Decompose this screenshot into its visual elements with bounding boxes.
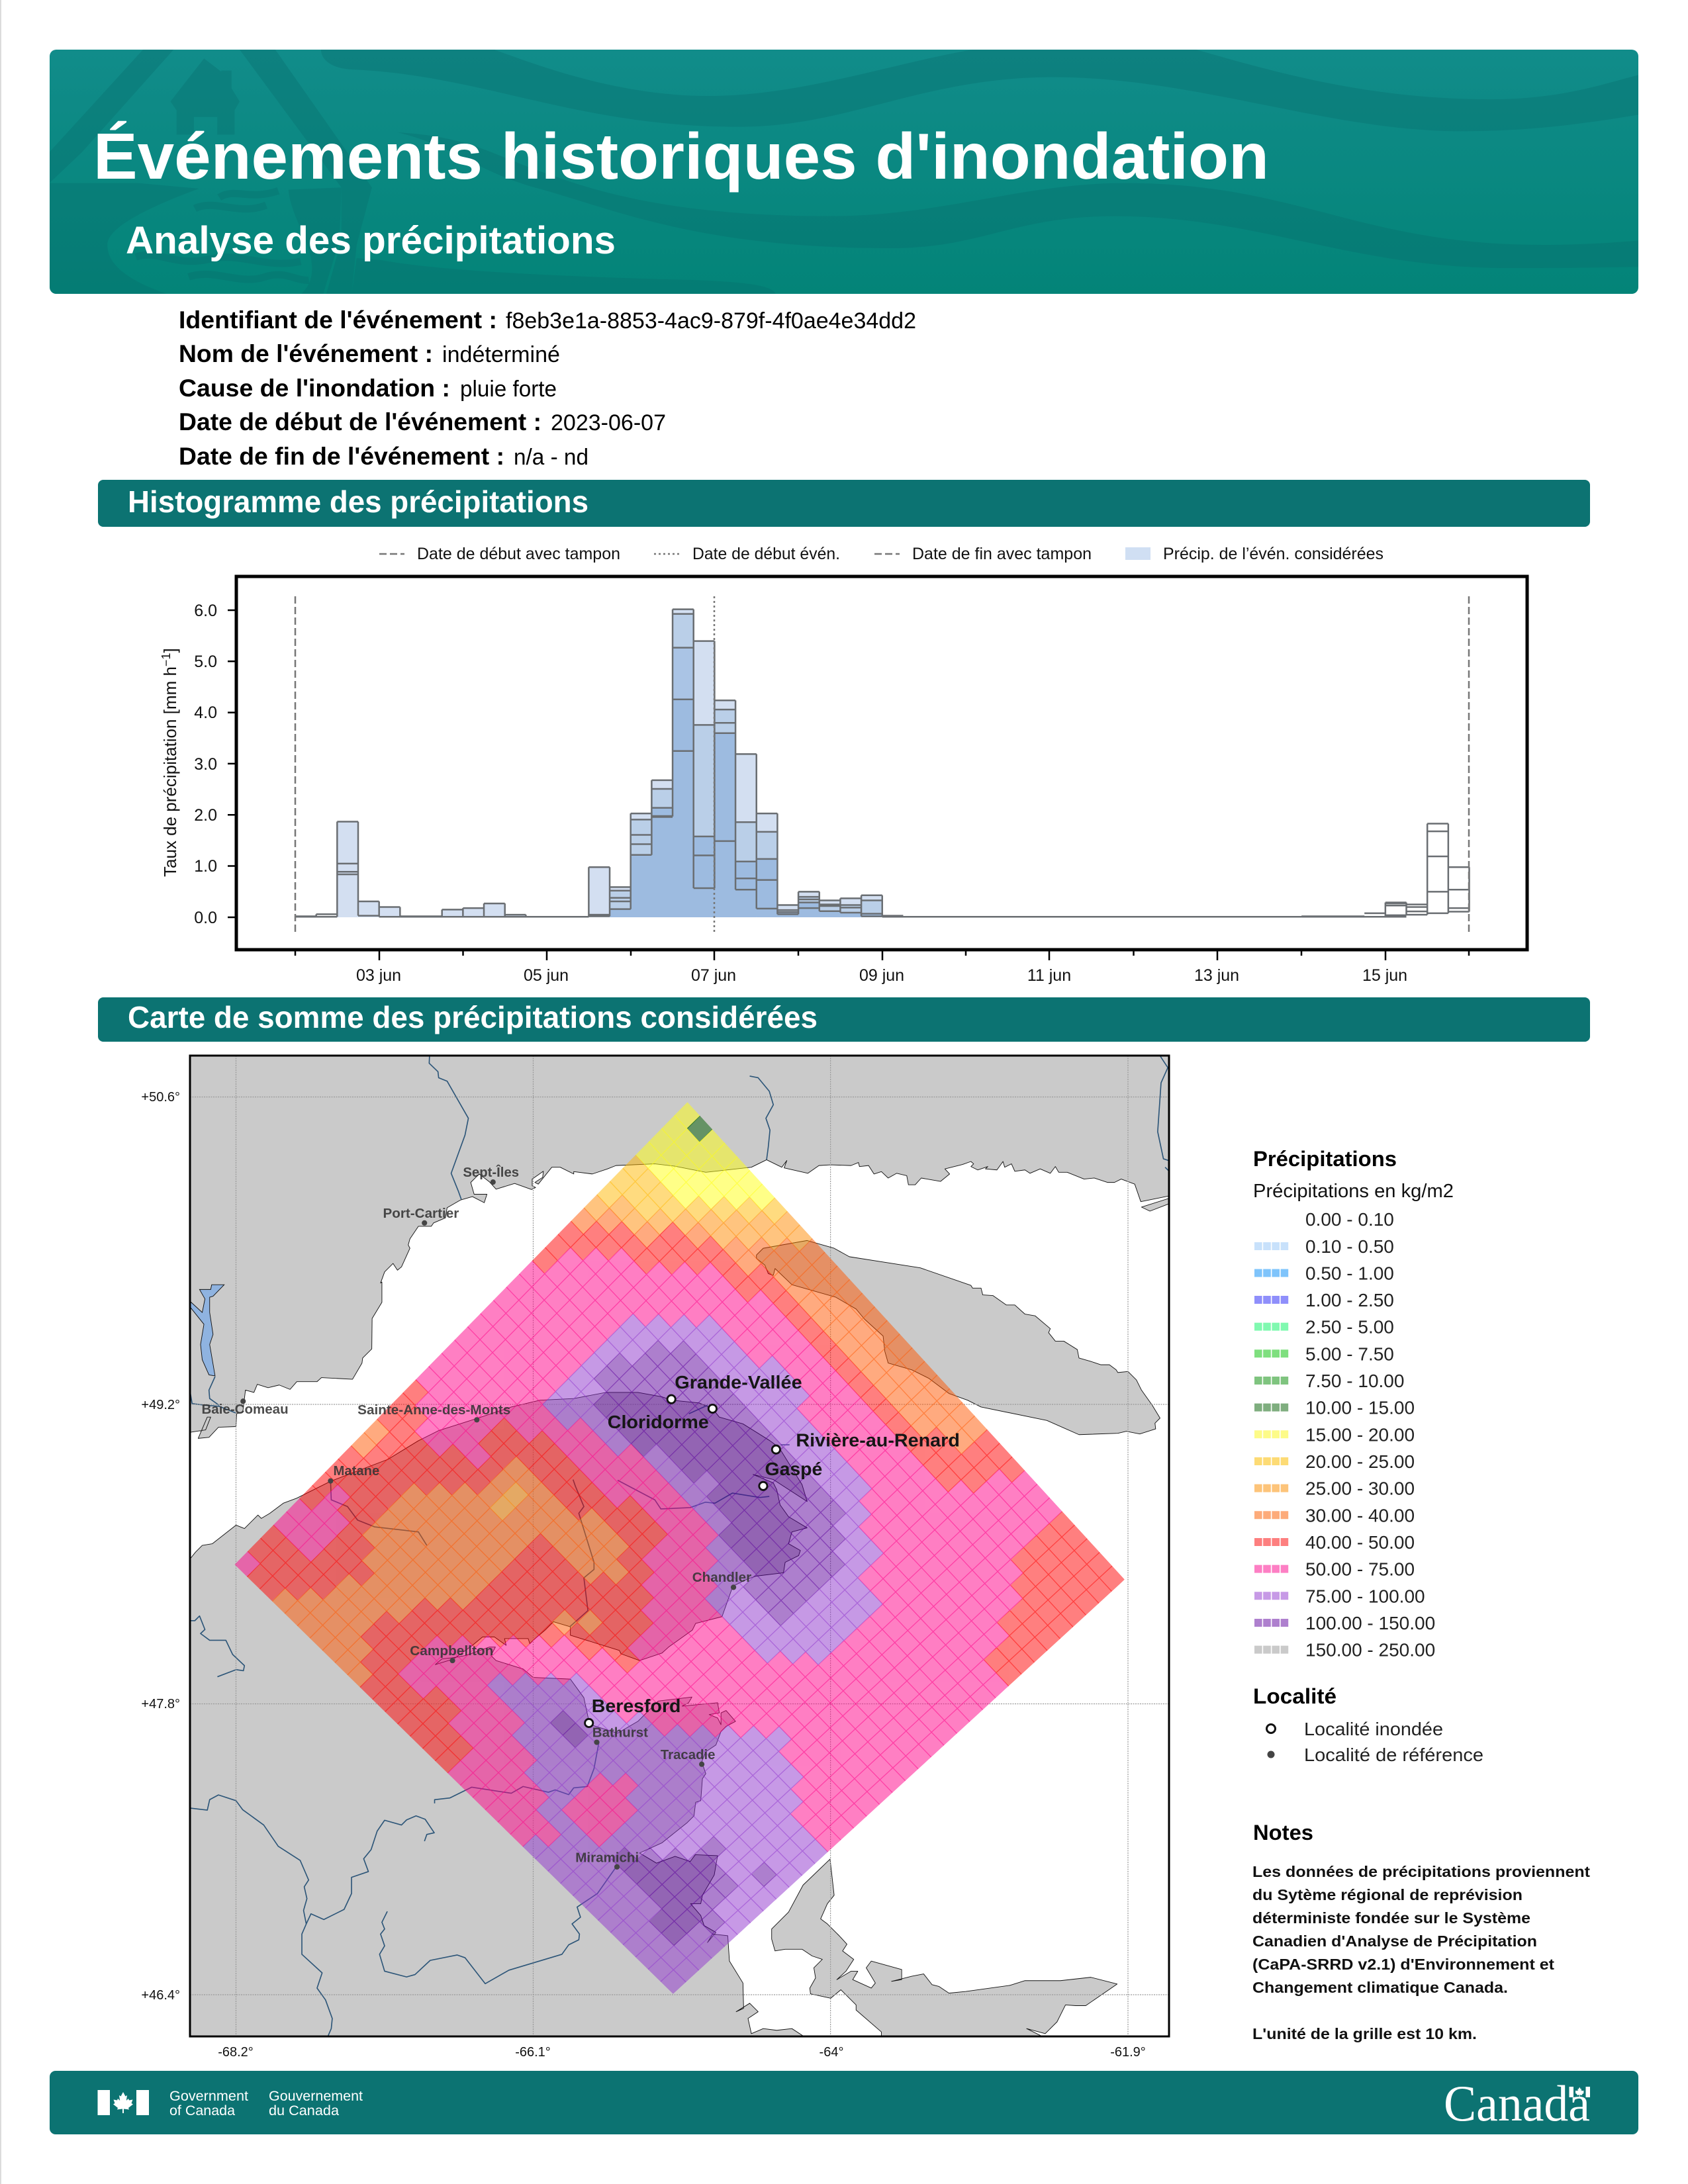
government wordmark	[169, 2087, 363, 2118]
notes text	[1252, 1863, 1590, 2042]
legend subtitle: Précipitations en kg/m2	[1253, 1181, 1454, 1202]
event name: indéterminé	[442, 342, 560, 367]
reference localities: Chandler	[692, 1570, 751, 1585]
histogram bars	[295, 610, 1470, 917]
section heading: map: Carte de somme des précipitations considérées	[128, 1000, 818, 1034]
government wordmark: Gouvernement	[269, 2087, 363, 2104]
end date: n/a - nd	[514, 445, 588, 470]
legend class labels: 30.00 - 40.00	[1305, 1505, 1415, 1525]
y axis title: Taux de précipitation [mm h	[160, 666, 180, 877]
reference localities	[201, 1164, 751, 1870]
legend class labels: 75.00 - 100.00	[1305, 1586, 1425, 1606]
x axis ticks and labels: 13 jun	[1194, 966, 1239, 985]
flooded localities: Gaspé	[765, 1459, 822, 1479]
x axis ticks and labels: 05 jun	[524, 966, 569, 985]
reference localities: Bathurst	[592, 1725, 648, 1740]
flooded localities	[585, 1372, 960, 1727]
y axis ticks and labels: 6.0	[194, 602, 217, 620]
government wordmark: du Canada	[269, 2102, 340, 2118]
legend class labels: 0.50 - 1.00	[1305, 1263, 1394, 1283]
end date: Date de fin de l'événement :	[179, 443, 504, 470]
legend class labels: 150.00 - 250.00	[1305, 1640, 1435, 1661]
map latitude labels: +49.2°	[141, 1398, 180, 1412]
page edge line	[0, 0, 1, 2184]
legend class labels: 10.00 - 15.00	[1305, 1398, 1415, 1418]
event metadata block	[179, 306, 916, 470]
precipitation grid overlay	[233, 1102, 1125, 1996]
histogram legend	[379, 545, 1383, 563]
legend class labels: 0.00 - 0.10	[1305, 1209, 1394, 1230]
y axis title: ]	[160, 648, 180, 653]
legend class labels: 40.00 - 50.00	[1305, 1532, 1415, 1553]
map latitude labels: +46.4°	[141, 1988, 180, 2003]
notes heading: Notes	[1253, 1821, 1313, 1844]
notes text: (CaPA-SRRD v2.1) d'Environnement et	[1252, 1956, 1554, 1973]
notes text: Les données de précipitations proviennent	[1252, 1863, 1590, 1880]
rivers	[191, 1056, 1168, 2036]
flooded localities: Cloridorme	[608, 1412, 709, 1432]
x axis ticks and labels	[295, 950, 1469, 985]
event id: Identifiant de l'événement :	[179, 306, 497, 334]
legend class labels: 0.10 - 0.50	[1305, 1236, 1394, 1257]
legend class labels: 20.00 - 25.00	[1305, 1451, 1415, 1472]
map longitude labels: -68.2°	[218, 2045, 254, 2060]
reference localities: Matane	[333, 1464, 379, 1479]
flood cause: Cause de l'inondation :	[179, 375, 450, 402]
event id: f8eb3e1a-8853-4ac9-879f-4f0ae4e34dd2	[506, 308, 916, 334]
map latitude labels: +47.8°	[141, 1697, 180, 1711]
flooded locality key: Localité inondée	[1304, 1719, 1443, 1739]
map frame	[190, 1056, 1169, 2036]
nova scotia and prince edward island	[772, 1859, 1117, 2037]
map longitude labels: -64°	[820, 2045, 843, 2060]
legend: end with buffer: Date de fin avec tampon	[912, 545, 1092, 563]
start buffer date line	[295, 596, 296, 933]
x axis ticks and labels: 11 jun	[1027, 966, 1071, 985]
precipitation map	[141, 1056, 1169, 2060]
x axis ticks and labels: 03 jun	[356, 966, 401, 985]
locality heading: Localité	[1253, 1684, 1336, 1708]
notes text: déterministe fondée sur le Système	[1252, 1909, 1530, 1927]
legend: start with buffer: Date de début avec tampon	[417, 545, 620, 563]
y axis ticks and labels: 1.0	[194, 857, 217, 876]
notes text: L'unité de la grille est 10 km.	[1252, 2025, 1477, 2042]
legend swatches	[1254, 1246, 1289, 1650]
y axis title: −1	[160, 653, 173, 666]
government wordmark: of Canada	[169, 2102, 236, 2118]
reference locality key: Localité de référence	[1304, 1745, 1483, 1765]
y axis ticks and labels: 3.0	[194, 755, 217, 774]
legend class labels: 100.00 - 150.00	[1305, 1613, 1435, 1633]
land masses	[190, 1056, 1169, 2037]
y axis ticks and labels: 0.0	[194, 909, 217, 927]
legend: considered precipitation: Précip. de l’évén. considérées	[1163, 545, 1383, 563]
reference localities: Tracadie	[661, 1748, 716, 1762]
notes text: du Sytème régional de reprévision	[1252, 1886, 1523, 1903]
legend class labels: 25.00 - 30.00	[1305, 1479, 1415, 1499]
grid cell fills	[233, 1102, 1125, 1996]
flooded localities: Beresford	[592, 1696, 680, 1716]
y axis ticks and labels: 2.0	[194, 806, 217, 825]
notes text: Changement climatique Canada.	[1252, 1979, 1508, 1996]
header banner	[50, 50, 1638, 295]
legend class labels: 15.00 - 20.00	[1305, 1424, 1415, 1445]
reference localities: Baie-Comeau	[201, 1402, 289, 1417]
section heading: histogram: Histogramme des précipitations	[128, 484, 588, 519]
legend class labels: 5.00 - 7.50	[1305, 1343, 1394, 1364]
legend class labels	[1305, 1209, 1435, 1661]
chart frame	[236, 576, 1527, 950]
reference localities: Port-Cartier	[383, 1206, 459, 1221]
event name: Nom de l'événement :	[179, 340, 433, 367]
locality legend	[1253, 1684, 1483, 1765]
map longitude labels: -61.9°	[1110, 2045, 1146, 2060]
reference localities: Sept-Îles	[463, 1164, 519, 1180]
subtitle: Analyse des précipitations	[126, 219, 616, 262]
start date: 2023-06-07	[551, 410, 666, 435]
legend heading: Précipitations	[1253, 1147, 1397, 1171]
y axis ticks and labels	[194, 602, 236, 927]
map graticule	[190, 1056, 1169, 2036]
title: Événements historiques d'inondation	[93, 120, 1269, 193]
y axis ticks and labels: 4.0	[194, 704, 217, 722]
reference localities: Sainte-Anne-des-Monts	[357, 1403, 510, 1418]
precipitation histogram chart	[160, 576, 1527, 985]
start date: Date de début de l'événement :	[179, 408, 541, 435]
flood cause: pluie forte	[460, 377, 557, 402]
grid cell outlines	[233, 1102, 1125, 1996]
map latitude labels	[141, 1090, 180, 2003]
map longitude labels: -66.1°	[515, 2045, 551, 2060]
section heading: map	[98, 997, 1590, 1042]
map latitude labels: +50.6°	[141, 1090, 180, 1105]
event name	[179, 340, 560, 367]
footer band	[50, 2071, 1638, 2134]
map locality markers and labels	[201, 1164, 960, 1870]
legend class labels: 7.50 - 10.00	[1305, 1371, 1404, 1391]
map longitude labels	[218, 2045, 1146, 2060]
y axis ticks and labels: 5.0	[194, 653, 217, 671]
notes text: Canadien d'Analyse de Précipitation	[1252, 1933, 1537, 1950]
legend class labels: 1.00 - 2.50	[1305, 1290, 1394, 1310]
precipitation legend	[1253, 1147, 1454, 1661]
x axis ticks and labels: 09 jun	[859, 966, 904, 985]
anticosti island	[757, 1240, 1160, 1435]
reference localities: Miramichi	[575, 1851, 639, 1866]
reference localities: Campbellton	[410, 1644, 493, 1659]
section heading: histogram	[98, 480, 1590, 527]
x axis ticks and labels: 07 jun	[691, 966, 736, 985]
flooded localities: Grande-Vallée	[675, 1372, 802, 1392]
x axis ticks and labels: 15 jun	[1362, 966, 1407, 985]
legend: event start: Date de début évén.	[692, 545, 840, 563]
legend class labels: 2.50 - 5.00	[1305, 1317, 1394, 1338]
event id	[179, 306, 916, 334]
government wordmark: Government	[169, 2087, 248, 2104]
canada wordmark: Canada	[1444, 2075, 1590, 2132]
header wave and flood logo artwork	[50, 50, 1638, 295]
end buffer date line	[1468, 596, 1470, 933]
notes block	[1252, 1821, 1590, 2042]
government of canada flag	[98, 2090, 149, 2115]
flooded localities: Rivière-au-Renard	[796, 1430, 960, 1451]
legend class labels: 50.00 - 75.00	[1305, 1559, 1415, 1580]
event start date line	[714, 596, 715, 933]
lake	[191, 1285, 224, 1376]
